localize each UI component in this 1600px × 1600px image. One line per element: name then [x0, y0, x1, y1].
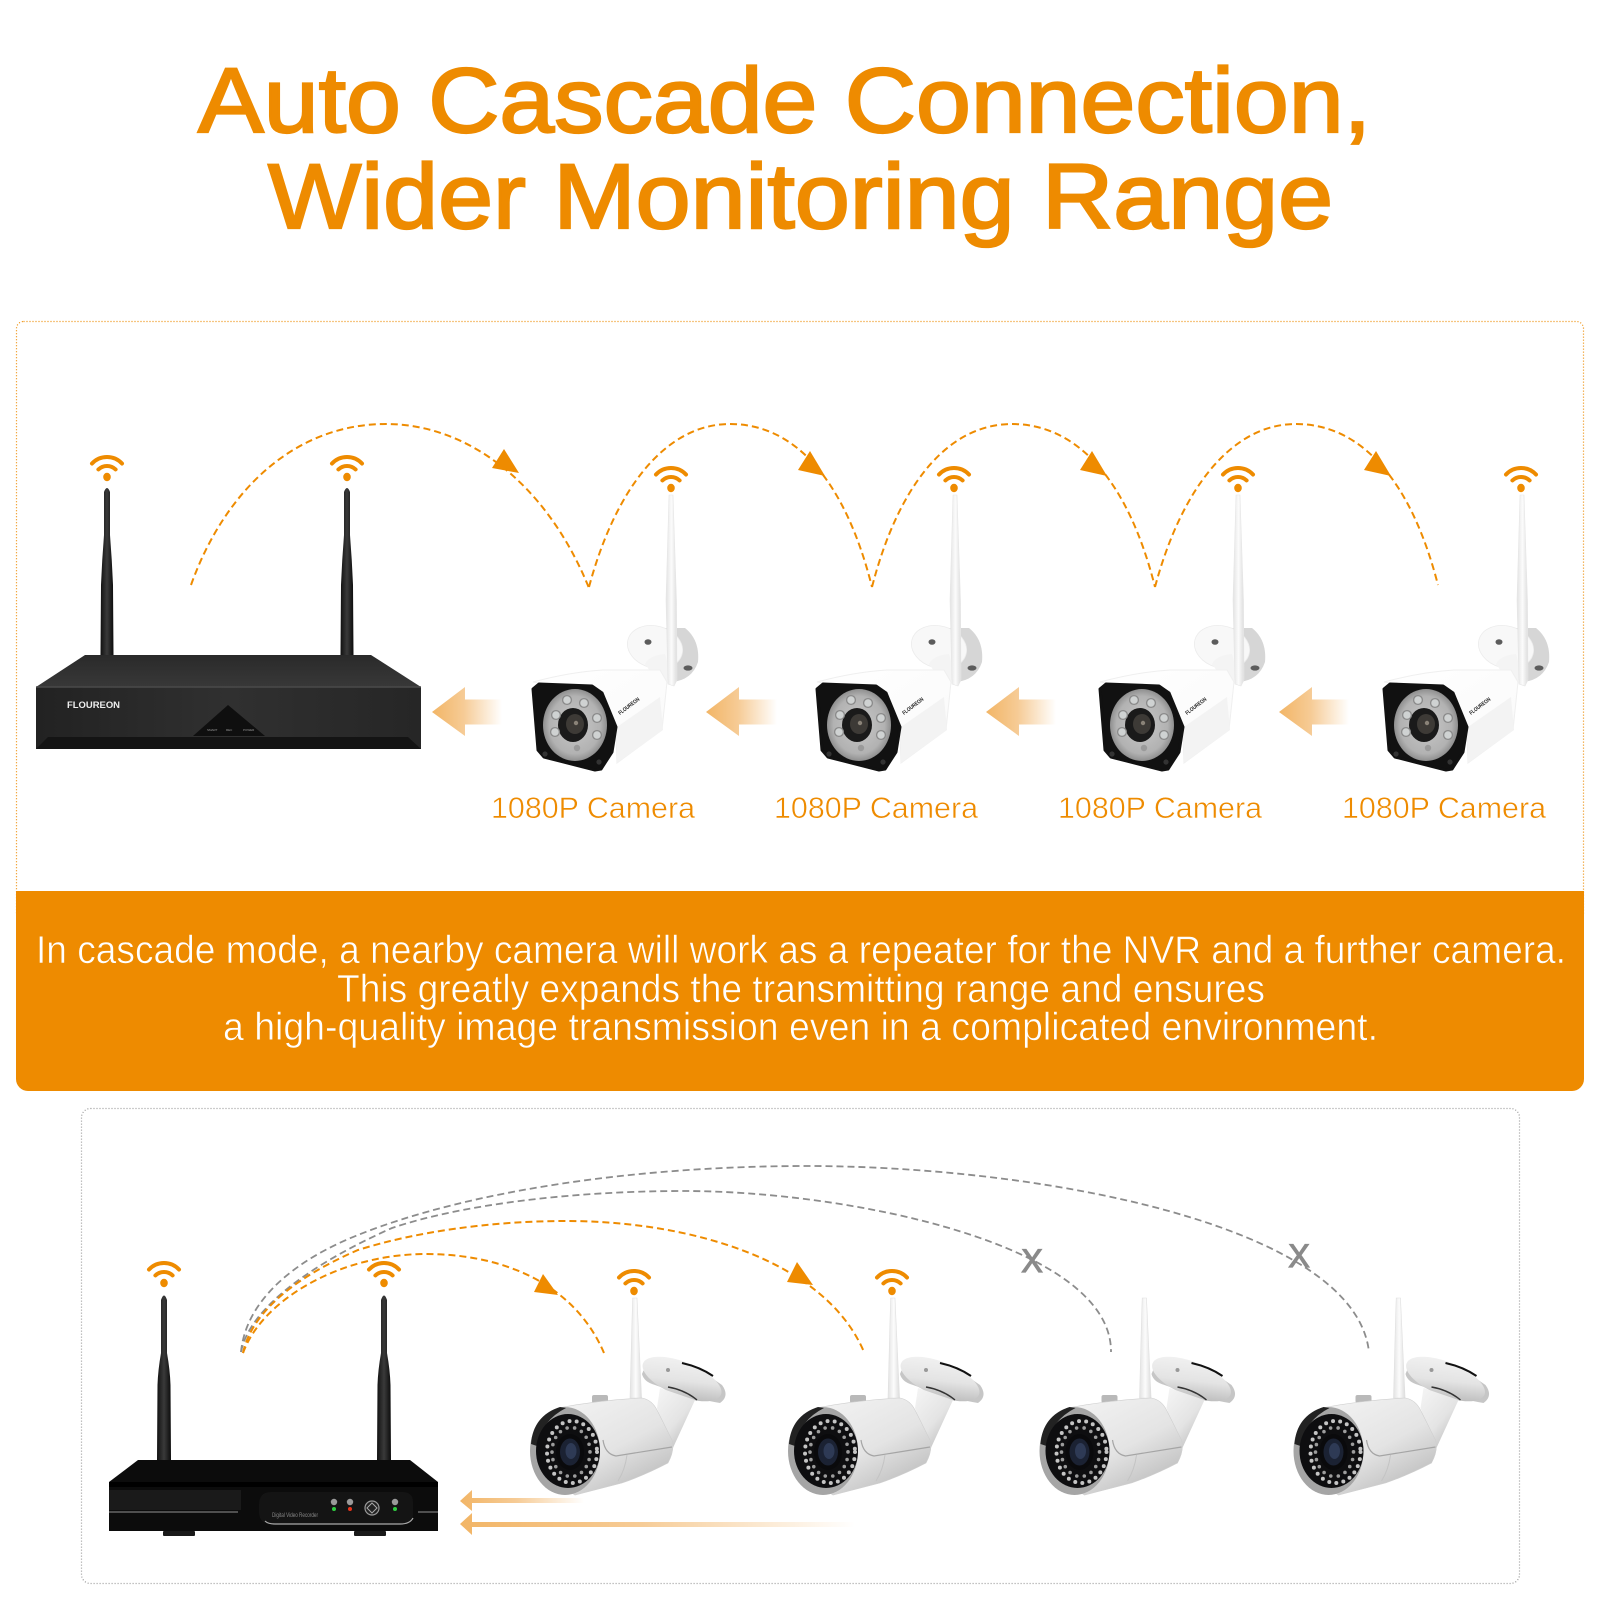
banner text: a high-quality image transmission even in a complicated environment. — [223, 1006, 1378, 1049]
arrow: camera 3 to camera 2 — [986, 687, 1056, 736]
camera 2: FLOUREON — [902, 697, 925, 717]
icon: wifi camera 1 — [619, 1271, 649, 1295]
orange arrowheads — [534, 1262, 813, 1295]
NVR recorder black — [109, 1296, 438, 1536]
banner text: In cascade mode, a nearby camera will work as a repeater for the NVR and a further camera. — [36, 929, 1566, 972]
NVR recorder with antennas: POWER — [243, 728, 255, 732]
panel: non-cascade diagram — [82, 1108, 1520, 1584]
orange banner — [16, 891, 1584, 1091]
white camera 2 — [788, 1298, 985, 1495]
NVR recorder black: Digital Video Recorder — [272, 1512, 318, 1519]
X marks: X — [1288, 1238, 1310, 1274]
icon: wifi NVR left — [149, 1263, 179, 1287]
NVR recorder with antennas: FLOUREON — [67, 700, 120, 711]
camera 1 — [533, 495, 698, 770]
icon: wifi camera 4 — [1506, 468, 1536, 492]
NVR recorder with antennas: REC — [226, 728, 233, 732]
camera 2 — [817, 495, 982, 770]
arrow: camera 4 to camera 3 — [1279, 687, 1349, 736]
camera labels: 1080P Camera — [1342, 792, 1546, 825]
camera 4: FLOUREON — [1469, 697, 1492, 717]
arrow: long return — [460, 1513, 855, 1535]
white camera 1 — [530, 1298, 727, 1495]
banner text — [36, 929, 1566, 1049]
white camera 3 — [1040, 1298, 1237, 1495]
arrow: camera 1 to NVR — [432, 687, 502, 736]
orange connected arcs — [243, 1221, 864, 1353]
banner text: This greatly expands the transmitting range and ensures — [337, 968, 1265, 1011]
icon: wifi camera 2 — [939, 468, 969, 492]
icon: wifi camera 2 — [877, 1271, 907, 1295]
arrow: camera 2 to camera 1 — [706, 687, 777, 736]
icon: wifi on NVR left antenna — [92, 457, 122, 481]
icon: wifi camera 3 — [1223, 468, 1253, 492]
X marks — [1021, 1238, 1310, 1279]
camera 4 — [1384, 495, 1549, 770]
icon: wifi on NVR right antenna — [332, 457, 362, 481]
icon: wifi camera 1 — [656, 468, 686, 492]
cascade arcs — [191, 424, 1438, 588]
X marks: X — [1021, 1243, 1043, 1279]
white camera 4 — [1294, 1298, 1491, 1495]
title: Wider Monitoring Range — [268, 146, 1333, 248]
NVR recorder with antennas — [36, 488, 421, 749]
icon: wifi NVR right — [369, 1263, 399, 1287]
title — [198, 50, 1371, 248]
camera labels: 1080P Camera — [491, 792, 695, 825]
arc arrowheads — [492, 449, 1391, 476]
gray failed arcs — [241, 1166, 1369, 1352]
arrow: short return — [460, 1490, 584, 1511]
camera labels: 1080P Camera — [1058, 792, 1262, 825]
NVR recorder with antennas: SMART — [207, 728, 218, 732]
panel: cascade mode diagram — [16, 322, 1584, 922]
camera 1: FLOUREON — [618, 697, 641, 717]
camera 3: FLOUREON — [1185, 697, 1208, 717]
camera labels — [491, 792, 1546, 825]
title: Auto Cascade Connection, — [198, 50, 1371, 152]
camera 3 — [1100, 495, 1265, 770]
camera labels: 1080P Camera — [774, 792, 978, 825]
